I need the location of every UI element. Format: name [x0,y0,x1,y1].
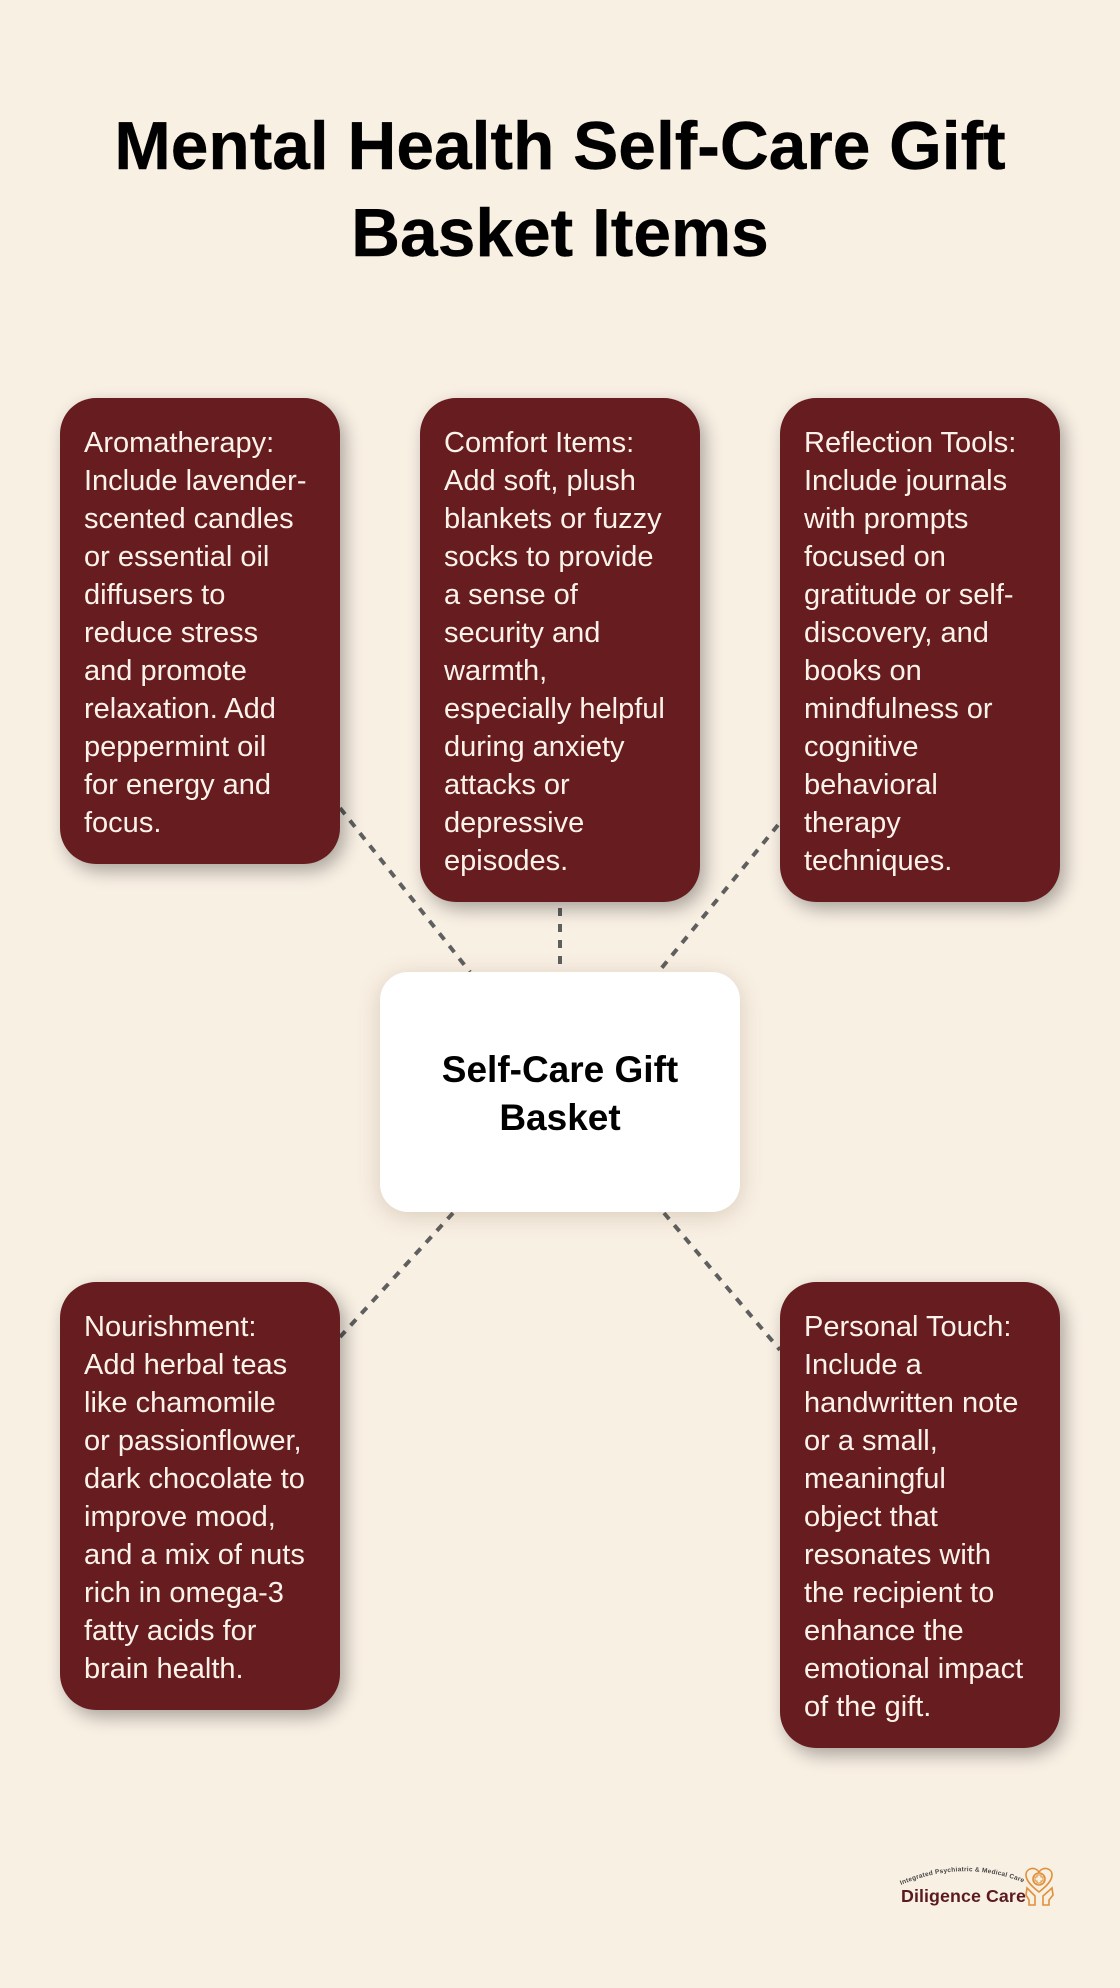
center node: Basket [499,1097,621,1138]
panel: personal touch: of the gift. [804,1690,931,1722]
panel: nourishment: Add herbal teas [84,1348,287,1380]
panel: personal touch: object that [804,1500,938,1532]
panel: nourishment: and a mix of nuts [84,1538,305,1570]
panel: nourishment: Nourishment: [84,1310,256,1342]
panel: comfort items: a sense of [444,578,578,610]
panel: aromatherapy [60,398,340,864]
panel: comfort items: especially helpful [444,692,665,724]
panel: reflection tools [780,398,1060,902]
panel: personal touch: meaningful [804,1462,946,1494]
panel: reflection tools: books on [804,654,922,686]
panel: comfort items: during anxiety [444,730,625,762]
panel: personal touch: the recipient to [804,1576,994,1608]
center node [380,972,740,1212]
panel: reflection tools: with prompts [804,502,968,534]
panel: reflection tools: focused on [804,540,946,572]
panel: aromatherapy: and promote [84,654,247,686]
panel: reflection tools: discovery, and [804,616,989,648]
panel: nourishment: improve mood, [84,1500,276,1532]
panel: reflection tools: gratitude or self- [804,578,1014,610]
panel: nourishment [60,1282,340,1710]
panel: reflection tools: Include journals [804,464,1007,496]
panel: aromatherapy: or essential oil [84,540,269,572]
panel: reflection tools: behavioral [804,768,938,800]
logo: Diligence Care: Diligence Care [901,1886,1026,1906]
panel: aromatherapy: reduce stress [84,616,258,648]
panel: reflection tools: techniques. [804,844,952,876]
title: Basket Items [351,196,769,271]
panel: personal touch: enhance the [804,1614,964,1646]
panel: personal touch [780,1282,1060,1748]
center node: Self-Care Gift [442,1049,678,1090]
panel: reflection tools: mindfulness or [804,692,993,724]
panel: personal touch: Personal Touch: [804,1310,1011,1342]
logo: Diligence Care: Integrated Psychiatric & Medical Care [900,1866,1024,1885]
title [114,109,1006,271]
panel: comfort items: episodes. [444,844,568,876]
panel: aromatherapy: diffusers to [84,578,225,610]
panel: aromatherapy: relaxation. Add [84,692,276,724]
panel: nourishment: rich in omega-3 [84,1576,284,1608]
panel: comfort items: blankets or fuzzy [444,502,662,534]
panel: comfort items [420,398,700,902]
title: Mental Health Self-Care Gift [114,109,1006,184]
panel: comfort items: attacks or [444,768,570,800]
panel: comfort items: depressive [444,806,584,838]
panel: reflection tools: cognitive [804,730,918,762]
panel: aromatherapy: Include lavender- [84,464,306,496]
panel: aromatherapy: for energy and [84,768,271,800]
panel: personal touch: or a small, [804,1424,938,1456]
panel: nourishment: fatty acids for [84,1614,256,1646]
panel: nourishment: like chamomile [84,1386,276,1418]
panel: aromatherapy: scented candles [84,502,294,534]
panel: personal touch: emotional impact [804,1652,1023,1684]
panel: comfort items: Add soft, plush [444,464,636,496]
panel: aromatherapy: focus. [84,806,161,838]
panel: reflection tools: Reflection Tools: [804,426,1016,458]
panel: nourishment: brain health. [84,1652,244,1684]
panel: comfort items: security and [444,616,600,648]
panel: nourishment: dark chocolate to [84,1462,305,1494]
panel: reflection tools: therapy [804,806,901,838]
panel: aromatherapy: Aromatherapy: [84,426,274,458]
panel: personal touch: resonates with [804,1538,991,1570]
panel: personal touch: Include a [804,1348,922,1380]
panel: nourishment: or passionflower, [84,1424,302,1456]
panel: comfort items: Comfort Items: [444,426,634,458]
panel: personal touch: handwritten note [804,1386,1018,1418]
panel: comfort items: socks to provide [444,540,654,572]
panel: aromatherapy: peppermint oil [84,730,266,762]
panel: comfort items: warmth, [444,654,547,686]
